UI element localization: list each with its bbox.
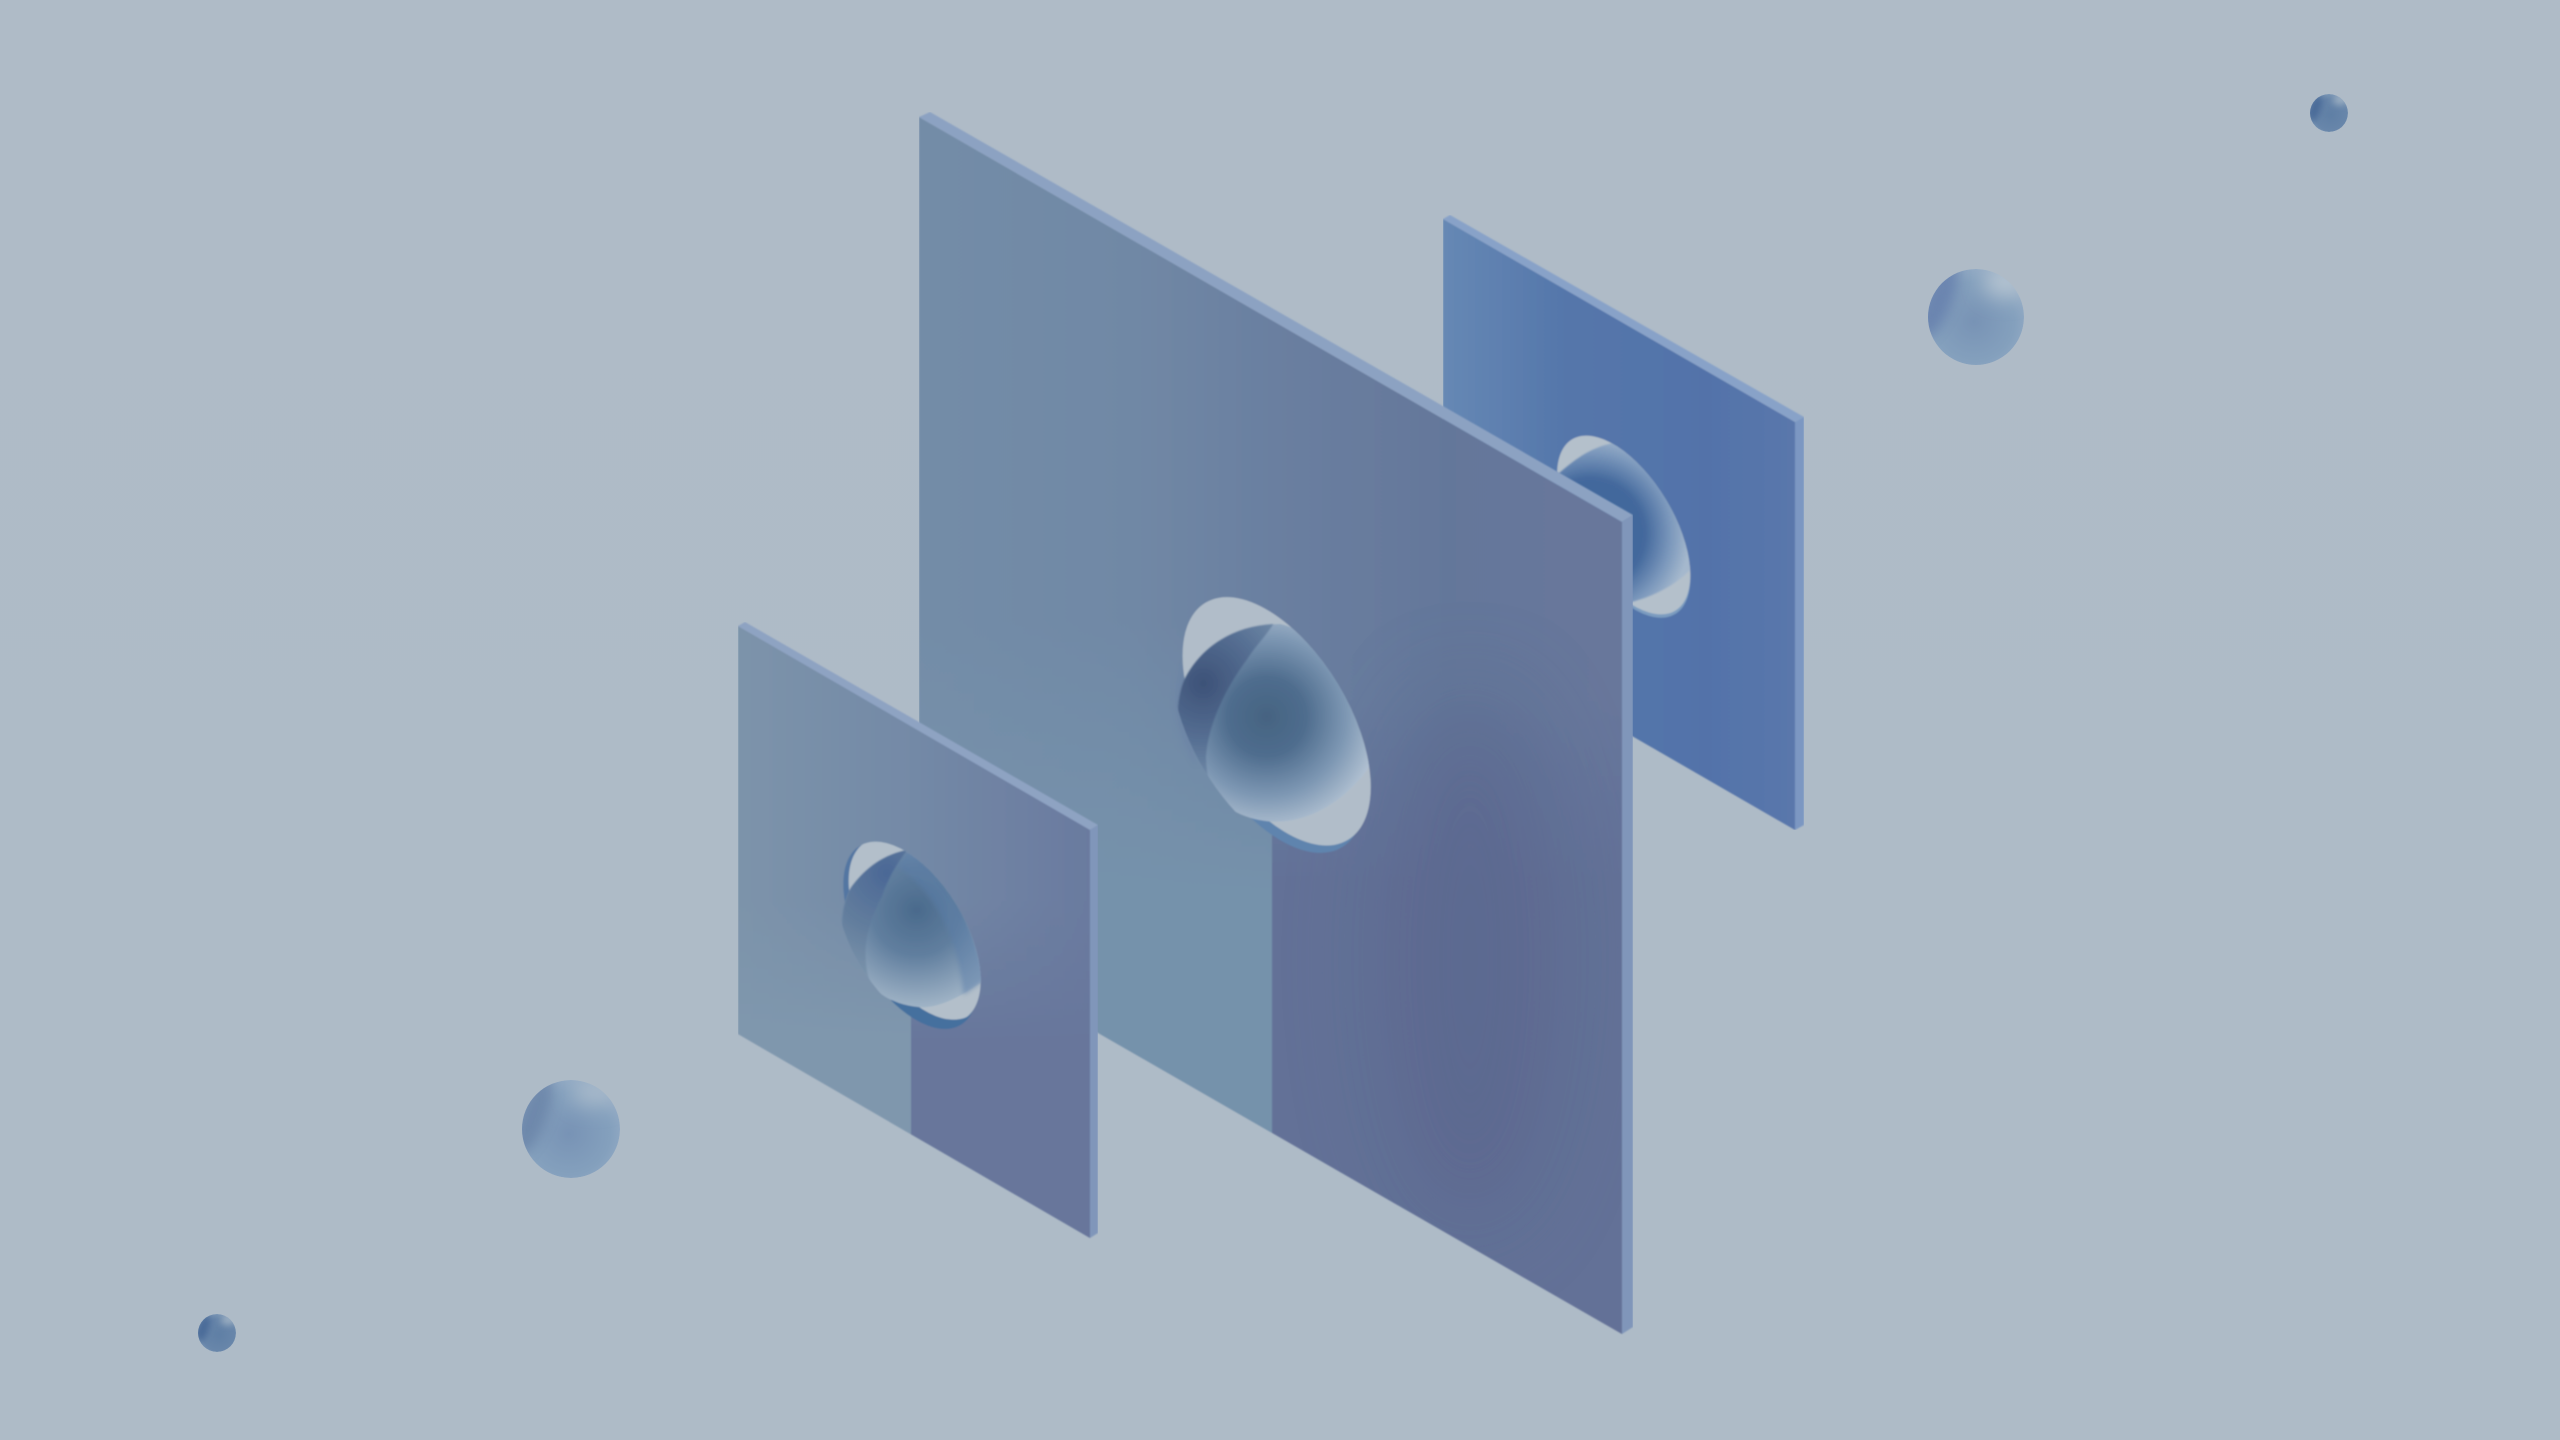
- large panel bulge: [1177, 596, 1372, 853]
- sphere: lower left medium: [522, 1080, 620, 1178]
- small panel side edge: [1090, 825, 1098, 1238]
- panel: large front: [919, 112, 1633, 1340]
- panel: small front: [738, 622, 1098, 1240]
- small panel bulge: [842, 841, 982, 1030]
- panel: back blue: [1443, 215, 1804, 830]
- sphere: top right small: [2310, 94, 2348, 132]
- large panel top edge: [919, 112, 1633, 522]
- back panel top edge: [1443, 215, 1804, 422]
- large panel side edge: [1622, 515, 1633, 1334]
- isometric scene: [198, 94, 2348, 1352]
- back panel side edge: [1795, 417, 1804, 830]
- sphere: upper right medium: [1928, 269, 2024, 365]
- sphere: bottom left small: [198, 1314, 236, 1352]
- small panel top edge: [738, 622, 1098, 830]
- back panel bulge: [1556, 434, 1692, 618]
